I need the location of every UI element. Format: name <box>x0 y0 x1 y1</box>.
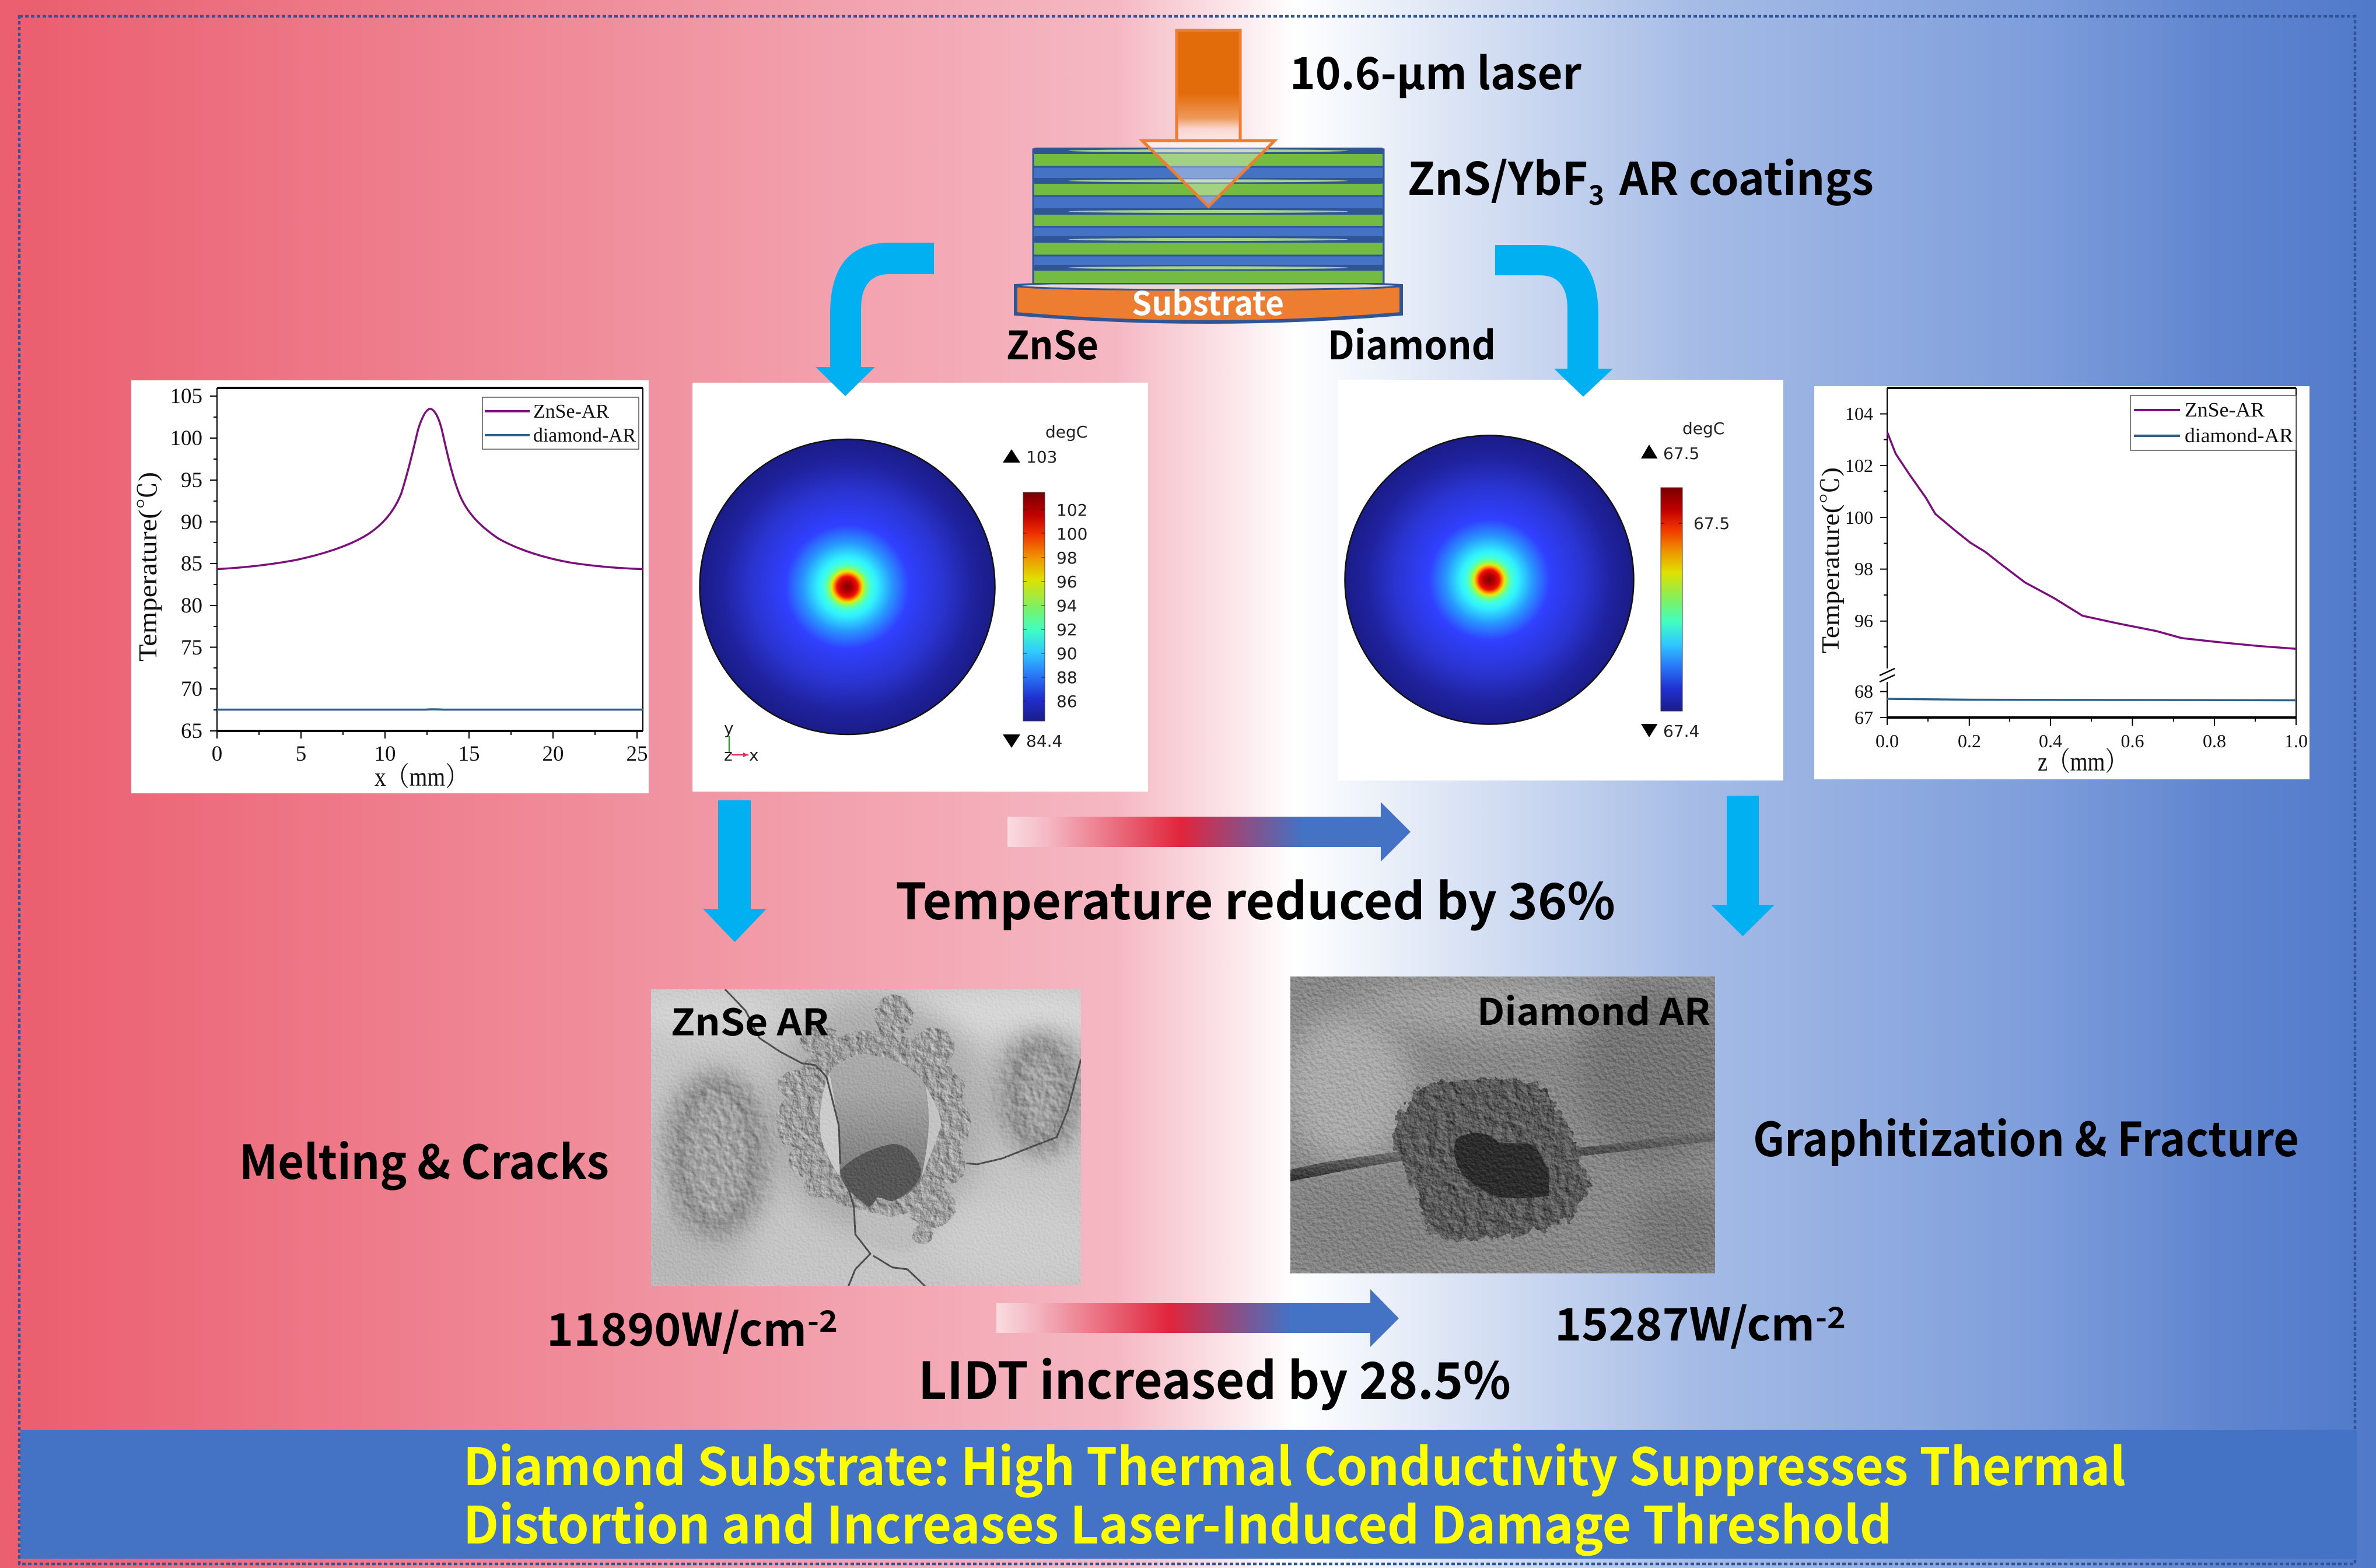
x axis numbers: 0.0 <box>1875 730 1899 751</box>
arrow: to diamond simulation <box>1495 245 1613 397</box>
y axis numbers: 85 <box>181 552 202 576</box>
heat disc <box>700 439 995 734</box>
laser label: 10.6-µm laser <box>1290 38 1582 102</box>
y axis title: Temperature(℃) <box>1818 467 1845 653</box>
x axis numbers: 0.8 <box>2203 730 2226 751</box>
arrow: diamond simulation to SEM <box>1711 796 1775 936</box>
value: ZnSe LIDT: -2 <box>807 1298 838 1340</box>
y axis numbers: 102 <box>1845 455 1873 476</box>
caption: graphitization and fracture: Graphitization & Fracture <box>1753 1102 2299 1170</box>
max marker <box>1003 447 1057 467</box>
max marker: 103 <box>1026 447 1057 467</box>
y axis numbers: 104 <box>1845 403 1873 424</box>
caption: melting and cracks: Melting & Cracks <box>239 1125 609 1193</box>
x axis numbers <box>1875 730 2308 751</box>
Diamond label: Diamond <box>1328 314 1496 371</box>
value: diamond LIDT: -2 <box>1815 1295 1846 1337</box>
temperature reduction text: Temperature reduced by 36% <box>895 861 1615 934</box>
y axis numbers <box>170 384 202 743</box>
gradient arrow: temperature <box>1007 802 1411 862</box>
crater mound below hole <box>855 1208 913 1226</box>
y axis numbers: 98 <box>1854 558 1873 579</box>
bottom title bar <box>20 1426 2357 1559</box>
colour bar: 94 <box>1056 596 1077 615</box>
y axis numbers: 105 <box>170 384 202 408</box>
crater rim <box>777 995 971 1244</box>
ZnSe-AR curve <box>217 409 643 569</box>
surface shading <box>1278 979 1736 1280</box>
axis triad: y <box>724 719 734 738</box>
x axis numbers: 25 <box>627 742 648 766</box>
min marker <box>1641 722 1699 741</box>
min marker <box>1003 732 1062 751</box>
colour bar: 67.5 <box>1693 514 1730 533</box>
y axis numbers: 96 <box>1854 610 1873 631</box>
chart: temperature vs x <box>131 380 649 793</box>
x axis numbers: 0 <box>212 742 222 766</box>
colour bar <box>1661 488 1730 711</box>
unit label: degC <box>1682 419 1724 438</box>
y axis numbers: 100 <box>1845 507 1873 528</box>
arrow: ZnSe simulation to SEM <box>703 800 767 942</box>
colour bar: 92 <box>1056 620 1077 639</box>
ZnSe label: ZnSe <box>1006 314 1098 371</box>
melt bumps, right <box>999 1032 1082 1157</box>
legend: ZnSe-AR <box>2185 398 2265 421</box>
surface grain <box>1290 977 1715 1273</box>
SEM image: ZnSe AR <box>651 989 1081 1286</box>
y axis numbers: 70 <box>181 677 202 701</box>
title line 1: Diamond Substrate: High Thermal Conductivity Suppresses Thermal <box>463 1426 2126 1500</box>
x axis numbers <box>212 742 648 766</box>
value: diamond LIDT: 15287W/cm <box>1555 1289 1815 1354</box>
y axis numbers: 90 <box>181 510 202 534</box>
light wall left <box>820 1073 839 1176</box>
y axis numbers <box>1845 403 1873 728</box>
coatings label: AR coatings <box>1619 144 1874 208</box>
surface shading <box>651 989 1081 1286</box>
surface grain <box>651 989 1081 1286</box>
y axis numbers: 100 <box>170 426 202 450</box>
y axis numbers: 67 <box>1854 707 1873 728</box>
light wall right <box>921 1084 941 1180</box>
colour bar: 90 <box>1056 644 1077 663</box>
label: Diamond AR: Diamond AR <box>1477 983 1710 1036</box>
laser arrow head overlay <box>1142 141 1275 206</box>
diamond-AR curve <box>1887 699 2296 700</box>
y axis numbers: 68 <box>1854 681 1873 702</box>
gradient arrow: LIDT <box>996 1289 1399 1347</box>
value: ZnSe LIDT: 11890W/cm <box>547 1294 807 1359</box>
legend: ZnSe-AR <box>533 401 609 422</box>
legend: diamond-AR <box>2185 424 2294 447</box>
coating stack <box>1016 148 1401 322</box>
substrate disc <box>1016 280 1401 322</box>
substrate label: Substrate <box>1132 278 1284 325</box>
axis triad: x <box>749 746 759 765</box>
crack channels <box>1290 1151 1405 1181</box>
min marker: 67.4 <box>1663 722 1699 741</box>
x axis numbers: 20 <box>543 742 564 766</box>
x axis numbers: 15 <box>459 742 480 766</box>
simulation: diamond temperature map <box>1338 380 1783 780</box>
laser arrow <box>1142 30 1275 206</box>
x axis numbers: 0.4 <box>2039 730 2062 751</box>
x axis numbers: 5 <box>296 742 306 766</box>
x axis title: z（mm） <box>2038 747 2127 776</box>
colour bar <box>1023 492 1087 721</box>
melt bumps, left <box>665 1071 769 1238</box>
colour bar: 96 <box>1056 572 1077 592</box>
x axis title: x（mm） <box>375 762 468 792</box>
y axis numbers: 95 <box>181 468 202 492</box>
title line 2: Distortion and Increases Laser-Induced Damage Threshold <box>463 1485 1892 1559</box>
legend <box>2130 396 2296 450</box>
colour bar: 86 <box>1056 692 1077 711</box>
colour bar: 88 <box>1056 668 1077 687</box>
max marker <box>1641 444 1699 463</box>
legend <box>482 397 639 449</box>
x axis numbers: 1.0 <box>2284 730 2308 751</box>
LIDT increase text: LIDT increased by 28.5% <box>918 1340 1511 1414</box>
colour bar: 102 <box>1056 501 1087 520</box>
coatings label <box>1408 144 1874 213</box>
x axis numbers: 0.2 <box>1958 730 1981 751</box>
label: ZnSe AR: ZnSe AR <box>671 993 829 1046</box>
arrow: to ZnSe simulation <box>816 243 934 396</box>
cracks <box>725 989 1081 1286</box>
coatings label: 3 <box>1588 174 1604 213</box>
chart: temperature vs z <box>1814 386 2309 779</box>
deep hole <box>840 1144 921 1207</box>
colour bar: 98 <box>1056 548 1077 568</box>
coatings label: ZnS/YbF <box>1408 144 1588 208</box>
min marker: 84.4 <box>1026 732 1062 751</box>
y axis numbers: 75 <box>181 636 202 660</box>
crater ring <box>1393 1079 1588 1240</box>
x axis numbers: 0.6 <box>2121 730 2144 751</box>
colour bar: 100 <box>1056 524 1087 544</box>
y axis numbers: 65 <box>181 719 202 743</box>
max marker: 67.5 <box>1663 444 1699 463</box>
simulation: ZnSe temperature map <box>692 383 1148 792</box>
axis triad: z <box>724 746 733 765</box>
y axis title: Temperature(℃) <box>134 472 162 662</box>
ZnSe-AR curve <box>1887 432 2296 649</box>
dark hole <box>1454 1133 1549 1198</box>
y axis numbers: 80 <box>181 594 202 618</box>
axis triad <box>724 719 759 765</box>
x axis numbers: 10 <box>375 742 396 766</box>
legend: diamond-AR <box>533 425 636 446</box>
diamond-AR curve <box>217 708 643 710</box>
unit label: degC <box>1045 422 1087 442</box>
heat disc <box>1345 435 1633 724</box>
crater wall <box>818 1055 941 1207</box>
SEM image: Diamond AR <box>1278 977 1736 1280</box>
